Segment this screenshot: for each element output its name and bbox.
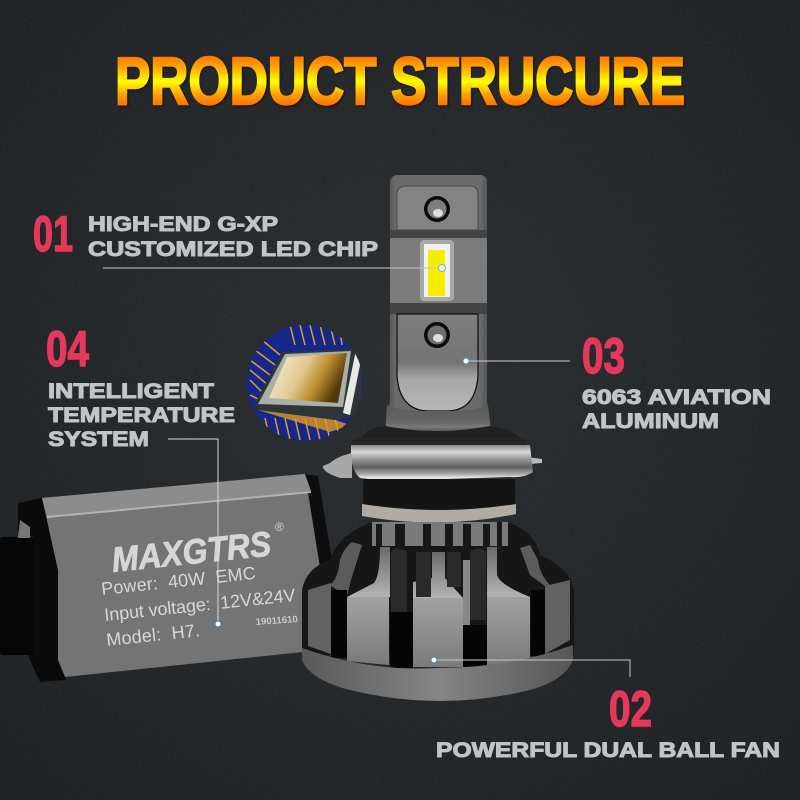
- cable: [0, 537, 36, 655]
- model spec: Model: H7.: [105, 620, 201, 650]
- callout 04: [46, 321, 235, 451]
- left end cap: [18, 498, 66, 682]
- number 04: 04: [46, 321, 89, 377]
- leader line 01: [103, 264, 446, 272]
- pale ring: [362, 504, 516, 523]
- label 04: INTELLIGENT: [48, 380, 214, 403]
- side fin blocks: [308, 580, 570, 654]
- voltage spec: Input voltage: 12V&24V: [103, 585, 296, 625]
- leader line 02: [431, 657, 630, 677]
- label 02: POWERFUL DUAL BALL FAN: [436, 739, 780, 762]
- clear collar with flange: [323, 445, 542, 481]
- base ring: [302, 645, 573, 701]
- callout 02: [436, 681, 780, 762]
- number 03: 03: [582, 328, 625, 384]
- bulb head: [385, 175, 491, 432]
- fan heatsink: [302, 522, 574, 668]
- lower screw: [424, 322, 450, 348]
- callout 03: [582, 328, 771, 433]
- brand name: MAXGTRS: [110, 524, 273, 580]
- power spec: Power: 40W EMC: [100, 563, 257, 599]
- circuit chip inset: [247, 325, 364, 441]
- callout 01: [33, 206, 378, 262]
- black sleeve: [363, 479, 515, 511]
- aluminum case: [42, 474, 322, 677]
- centre taper: [413, 552, 463, 598]
- label 04: SYSTEM: [48, 428, 149, 451]
- right end cap: [304, 474, 332, 575]
- bulb neck and black ring: [352, 405, 527, 451]
- LED bulb: [302, 175, 574, 701]
- upper screw: [424, 196, 450, 222]
- number 02: 02: [609, 681, 652, 737]
- label 01: HIGH-END G-XP: [88, 213, 278, 236]
- driver box: [0, 474, 332, 682]
- label 03: [582, 386, 771, 433]
- registered mark: ®: [275, 520, 284, 534]
- label 01: [88, 213, 378, 261]
- label 03: 6063 AVIATION: [582, 386, 771, 409]
- label 04: TEMPERATURE: [48, 404, 235, 427]
- serial number: 19011610: [255, 614, 298, 628]
- label 01: CUSTOMIZED LED CHIP: [88, 238, 378, 261]
- leader line 04: [168, 439, 221, 627]
- right stepped fin: [487, 547, 530, 597]
- number 01: 01: [33, 206, 73, 262]
- LED chip: [420, 240, 454, 301]
- leader line 03: [463, 358, 570, 364]
- left stepped fin: [308, 542, 362, 596]
- label 03: ALUMINUM: [582, 410, 719, 433]
- label 04: [48, 380, 235, 451]
- front fin blocks: [347, 597, 530, 667]
